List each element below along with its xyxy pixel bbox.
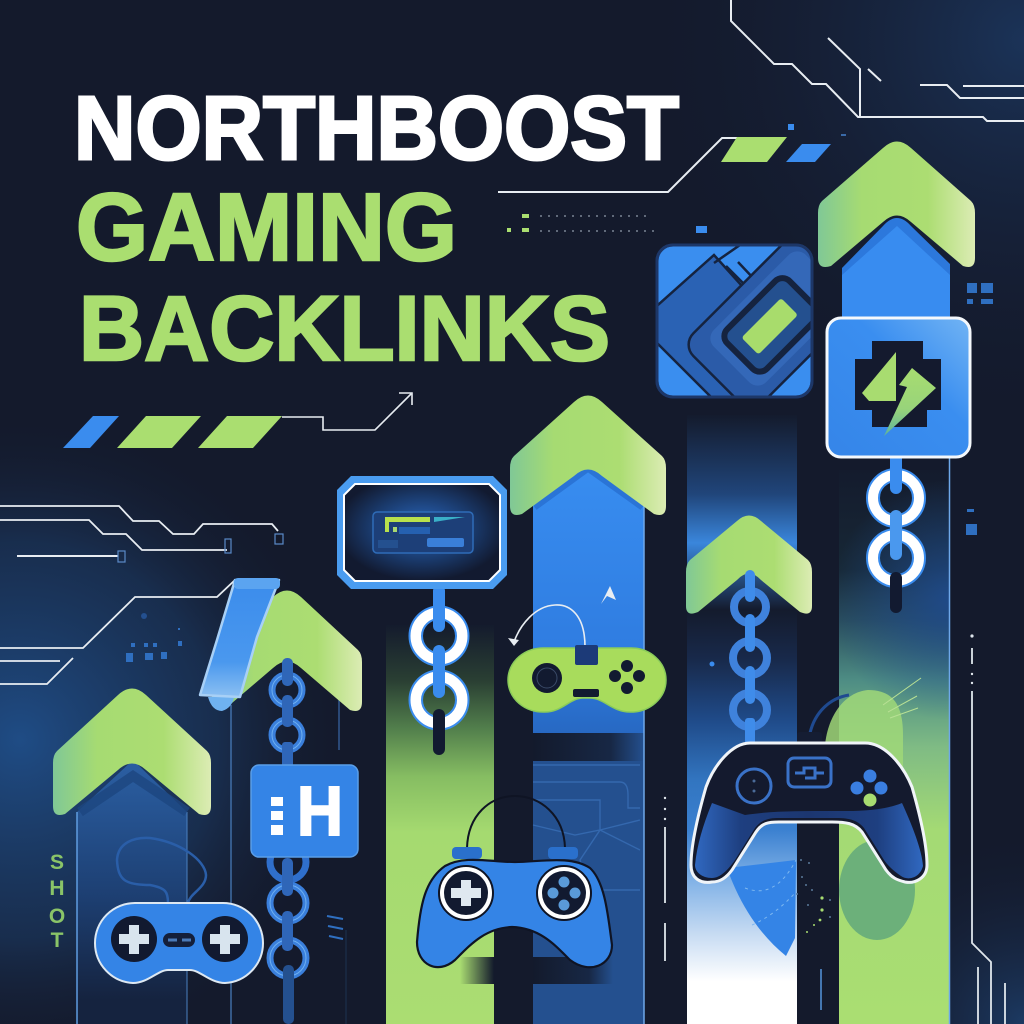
card: bolt icon (827, 318, 970, 457)
column: second arrow guide lines (231, 700, 346, 1024)
column: center blue bar (460, 465, 644, 1024)
title (74, 79, 679, 380)
letter H: H (297, 772, 343, 850)
card: octagon screen (337, 476, 507, 589)
left circuit lines (0, 506, 283, 684)
sideways label: SHOT: T (51, 929, 64, 952)
chain: arrow two (270, 658, 306, 1024)
column: far left arrow body (77, 760, 187, 1024)
map pattern (533, 765, 640, 925)
right side lines and pixels (664, 509, 1005, 1024)
title line: GAMING: GAMING (76, 174, 457, 281)
title line: BACKLINKS: BACKLINKS (79, 278, 610, 380)
small blue data pixels (126, 613, 182, 662)
chain: white links under octagon card (410, 585, 468, 755)
title line: NORTHBOOST: NORTHBOOST (74, 79, 679, 179)
arrow three chevron (510, 396, 666, 515)
card: pixel H icon (251, 765, 358, 857)
accent stripes with rising arrow (63, 393, 412, 448)
gamepad: green retro, center (508, 586, 666, 712)
card: tilted console icon (656, 244, 814, 398)
gamepad: blue retro, bottom left (95, 838, 263, 983)
sideways label: SHOT (49, 851, 65, 952)
column: fading blue-white bar (687, 415, 797, 1024)
sideways label: SHOT: H (49, 877, 65, 900)
arrow five body (842, 218, 950, 320)
sideways label: SHOT: S (50, 851, 64, 874)
column: tall right bar (839, 457, 950, 1024)
arrow two chevron (212, 590, 362, 711)
small blue pixel cluster (967, 283, 993, 304)
column: green bar (386, 625, 494, 1024)
gamepad: large blue, bottom center (417, 796, 612, 967)
arrow four chevron (686, 516, 812, 614)
chain: blue links under arrow four (733, 570, 767, 746)
sideways label: SHOT: O (49, 905, 65, 928)
arrow one chevron (53, 688, 211, 815)
mini console screen (373, 512, 473, 553)
gamepad: large dark, right (691, 695, 927, 882)
header accent parallelograms and dots (507, 124, 846, 233)
folded blue seven-shaped tab (200, 578, 280, 711)
chain: white links under bolt card (867, 452, 925, 613)
top right circuit lines (498, 0, 1024, 192)
shield and leaf shapes behind large dark gamepad (727, 678, 921, 956)
arrow five chevron (818, 142, 975, 267)
